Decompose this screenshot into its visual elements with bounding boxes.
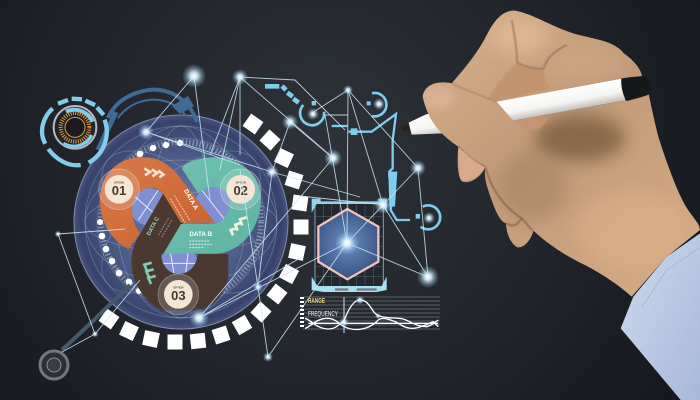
white dots ring [97, 140, 183, 294]
gauge icon [42, 99, 107, 165]
badge 03 [158, 274, 199, 315]
shirt cuff [621, 233, 700, 400]
right circuit icons [265, 86, 440, 229]
teal ribbon [163, 157, 261, 254]
network nodes [54, 64, 439, 362]
badge 01: OPTION [114, 180, 124, 184]
teal chevrons [231, 217, 247, 235]
ribbon loop [99, 157, 261, 315]
label: data a: DATA A [182, 188, 199, 212]
orange ribbon [100, 157, 215, 249]
lower ring [421, 205, 440, 229]
pen [401, 79, 625, 135]
orange chevrons [144, 168, 163, 177]
connector arc [98, 90, 197, 150]
badge 02 [220, 169, 261, 210]
hexagon panel [312, 199, 387, 292]
badge 02: OPTION [236, 180, 246, 184]
label: data b: DATA B [189, 231, 212, 238]
network lines [58, 76, 428, 357]
brown chevrons [144, 263, 156, 284]
frequency label: FREQUENCY [308, 309, 338, 318]
white squares ring [99, 114, 308, 350]
bottom left icon [40, 285, 130, 379]
range label: RANGE [308, 298, 325, 305]
globe [74, 115, 288, 329]
pen cap [621, 77, 652, 101]
badge 03: 03 [171, 288, 186, 303]
hand back [423, 11, 700, 297]
label: data c: DATA C [146, 216, 161, 237]
holes [130, 186, 232, 284]
frequency chart [300, 296, 440, 333]
badge 02: 02 [233, 183, 248, 198]
hand shading [422, 18, 690, 270]
label: data a [170, 188, 199, 223]
badge 01: 01 [112, 183, 126, 198]
hand [422, 11, 700, 297]
top right ring [372, 93, 386, 116]
pen tip [401, 124, 409, 132]
label: data b [189, 231, 212, 248]
top left ring [300, 105, 324, 125]
badge 01 [99, 169, 139, 210]
pen body [409, 79, 625, 135]
badge 03: OPTION [173, 285, 184, 289]
brown ribbon [132, 193, 228, 311]
segmented bars [265, 86, 299, 103]
frequency waves [305, 300, 438, 329]
label: data c [146, 216, 172, 237]
circuit trace [332, 114, 410, 220]
